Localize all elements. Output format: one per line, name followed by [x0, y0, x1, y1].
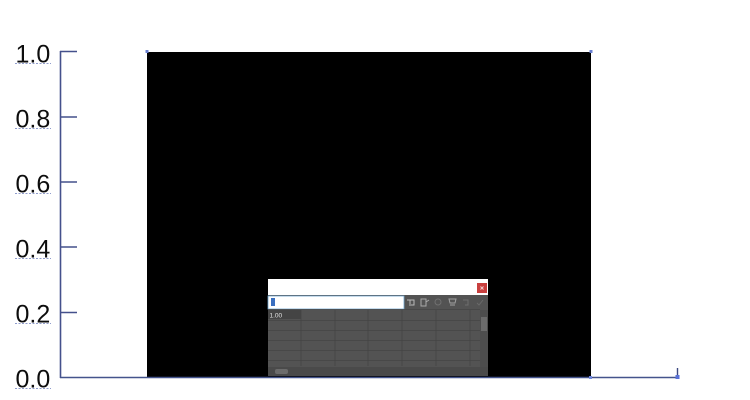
chart: bar with axes: [15, 40, 680, 394]
selected cell: 1.00: [270, 312, 283, 320]
toolbar icons: [407, 299, 483, 306]
selected cell: [268, 310, 301, 320]
dialog body: [268, 279, 488, 376]
label underlines: [15, 64, 51, 388]
y axis labels: [16, 40, 50, 394]
vertical scrollbar: [480, 310, 488, 368]
bar: black filled rectangle: [147, 52, 591, 377]
y axis labels: 0.6: [16, 170, 50, 198]
close button: [477, 283, 487, 293]
dialog: data entry window: [268, 279, 488, 376]
value input: [268, 296, 404, 309]
spreadsheet grid: [268, 310, 480, 366]
y axis with ticks: [60, 51, 77, 378]
y axis labels: 0.2: [16, 300, 50, 328]
horizontal scrollbar: [268, 367, 488, 376]
y axis labels: 1.0: [16, 40, 50, 68]
y axis labels: 0.0: [16, 366, 50, 394]
title bar: [268, 279, 488, 295]
x axis: [60, 50, 680, 379]
y axis labels: 0.8: [16, 106, 50, 134]
y axis labels: 0.4: [16, 236, 50, 264]
